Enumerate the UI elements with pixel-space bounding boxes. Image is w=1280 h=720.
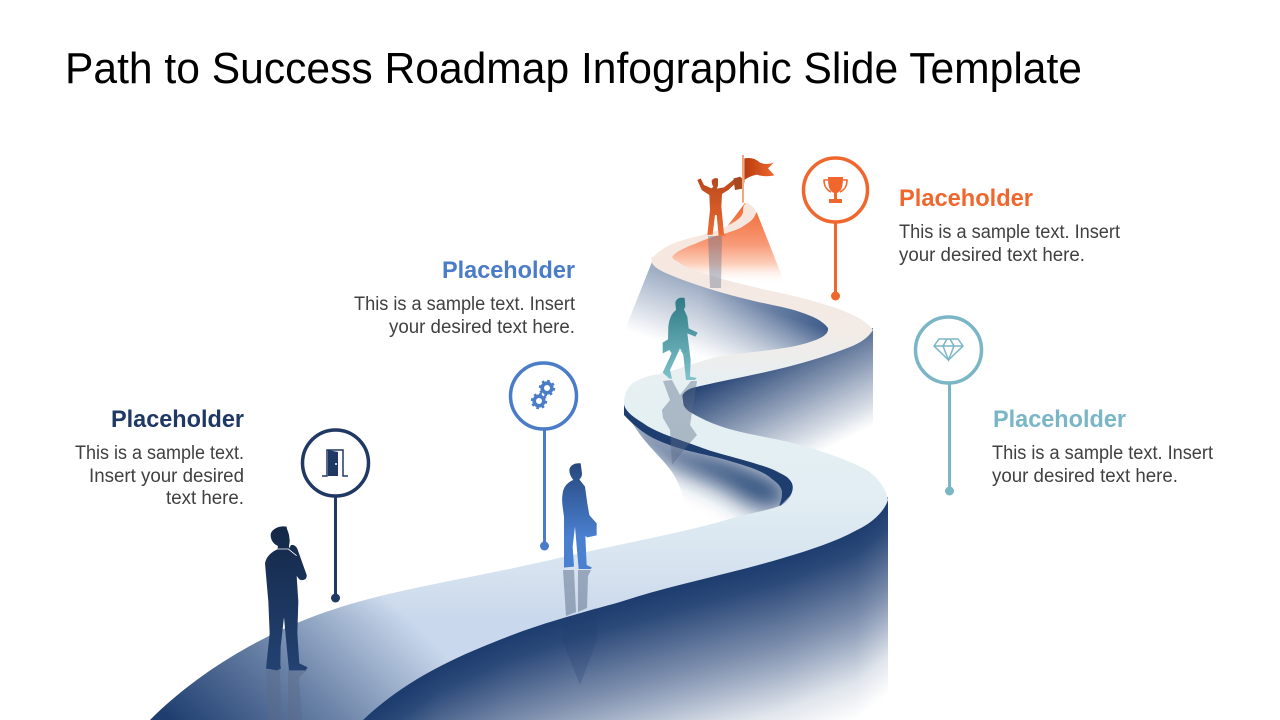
third road wall under dark band [624, 405, 790, 510]
text block: blue: Placeholder [442, 257, 575, 284]
icon: door [322, 450, 348, 476]
upper road wall [621, 262, 835, 378]
text block: blue: This is a sample text. Insert [354, 294, 576, 315]
text block: teal: your desired text here. [992, 466, 1178, 487]
middle road wall [680, 328, 873, 470]
icon: gears [532, 381, 554, 408]
text block: orange: your desired text here. [899, 245, 1085, 266]
text block: teal: This is a sample text. Insert [992, 443, 1214, 464]
lower road wall [363, 497, 888, 720]
dark road edge band [624, 403, 793, 507]
orange mountain peak [668, 203, 785, 284]
text block: orange: Placeholder [899, 185, 1033, 212]
text block: navy [75, 406, 244, 509]
flag on summit [743, 155, 774, 203]
road surface [150, 203, 888, 720]
road lower-left shading [150, 567, 560, 720]
text block: navy: This is a sample text. [75, 443, 244, 464]
title: Path to Success Roadmap Infographic Slide Template [65, 44, 1082, 93]
text block: navy: Placeholder [111, 406, 244, 433]
reflection: man one [266, 670, 307, 720]
reflection: man four [708, 236, 722, 288]
text block: teal: Placeholder [993, 406, 1126, 433]
pin one: door [302, 430, 368, 602]
figure: blue man with briefcase [562, 463, 597, 569]
icon: trophy [824, 177, 847, 203]
reflection: man three [662, 380, 697, 465]
pin three: trophy [804, 158, 868, 300]
text block: navy: Insert your desired [89, 466, 244, 487]
figure: navy thinking man [265, 526, 308, 670]
illustration: winding road [150, 155, 888, 720]
pin two: gears [510, 363, 576, 550]
text block: teal [992, 406, 1214, 487]
figure: orange man raising arms [697, 177, 745, 236]
text block: navy: text here. [166, 488, 244, 509]
text block: blue: your desired text here. [389, 317, 575, 338]
reflection: man two [562, 570, 597, 685]
figure: teal walking man [663, 298, 698, 380]
text block: blue [354, 257, 576, 338]
text block: orange: This is a sample text. Insert [899, 222, 1121, 243]
text block: orange [899, 185, 1121, 266]
pin four: diamond [916, 317, 982, 496]
icon: diamond [934, 339, 963, 360]
